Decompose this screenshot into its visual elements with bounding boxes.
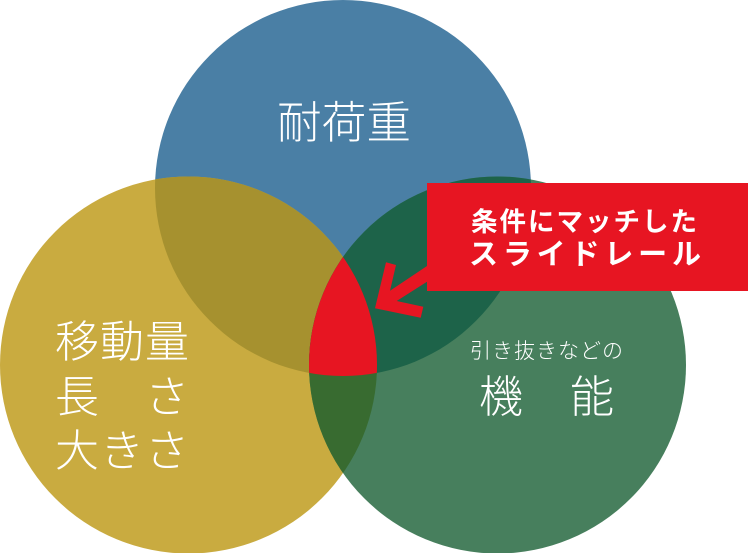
label: function	[470, 340, 623, 422]
overlap: load and travel	[155, 176, 343, 373]
label: travel, length, size: 大きさ	[55, 427, 189, 476]
circle: load capacity	[155, 0, 531, 376]
label: travel, length, size	[55, 318, 189, 476]
callout arrow	[375, 262, 427, 318]
callout: matching slide rail: 条件にマッチした	[471, 207, 697, 237]
label: function: 機	[479, 373, 523, 422]
overlap: load and function	[309, 176, 531, 373]
circle: travel and length	[0, 176, 377, 553]
label: travel, length, size: 移動量	[55, 318, 189, 367]
label: travel, length, size: さ	[145, 373, 189, 422]
heading: load capacity: 耐荷重	[277, 99, 411, 148]
callout: matching slide rail	[427, 183, 748, 291]
label: function: 能	[570, 373, 614, 422]
label: function: 引き抜きなどの	[470, 340, 623, 363]
overlap: travel and function	[309, 257, 377, 473]
label: travel, length, size: 長	[55, 373, 99, 422]
overlap: center matching region	[309, 257, 377, 376]
circle: function	[309, 176, 686, 553]
callout: matching slide rail: スライドレール	[469, 239, 701, 271]
